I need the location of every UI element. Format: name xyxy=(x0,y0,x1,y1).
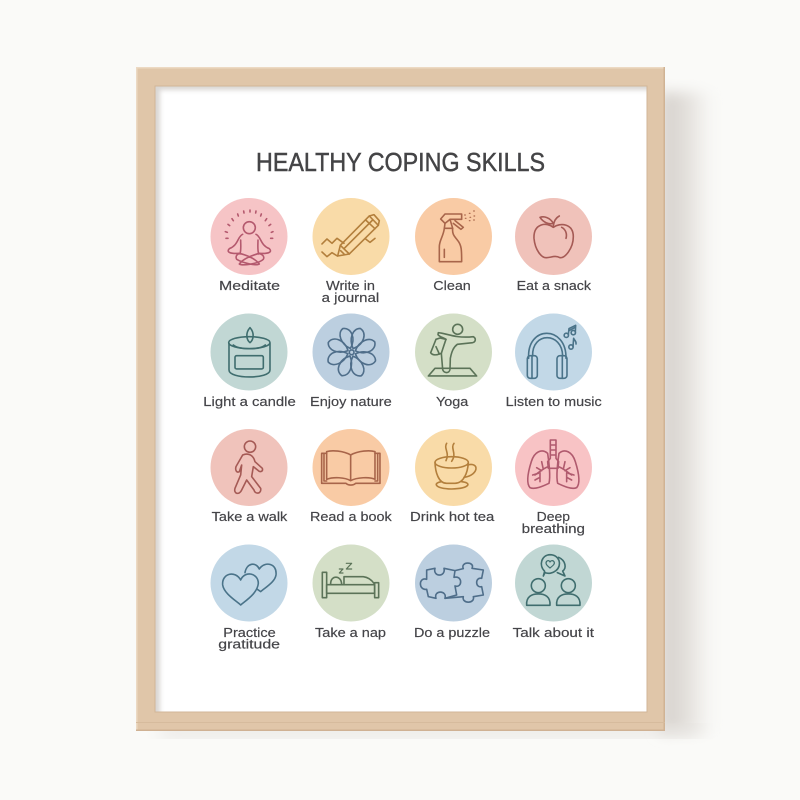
label: breathing xyxy=(522,521,585,536)
panel: gratitude xyxy=(210,544,288,652)
icon: two people talking xyxy=(527,555,580,605)
icon: pencil and writing xyxy=(322,215,379,257)
panel: meditate xyxy=(210,198,288,293)
panel: talk xyxy=(513,544,594,640)
label: Enjoy nature xyxy=(310,394,392,409)
label: Eat a snack xyxy=(517,278,592,293)
label: Do a puzzle xyxy=(414,625,490,640)
icon: spray bottle xyxy=(439,211,475,262)
label: Talk about it xyxy=(513,625,594,640)
icon: headphones and notes xyxy=(527,325,576,378)
frame shadow xyxy=(160,92,722,736)
poster paper xyxy=(150,80,652,718)
panel: nature xyxy=(310,314,392,409)
panel: puzzle xyxy=(414,544,492,640)
label: Deep xyxy=(537,509,570,524)
icon: cup of tea xyxy=(435,443,476,489)
panel: journal xyxy=(312,198,390,305)
label: Yoga xyxy=(436,394,469,409)
panel: music xyxy=(506,314,602,409)
panel: nap xyxy=(312,544,390,640)
label: Clean xyxy=(433,278,471,293)
icon: puzzle pieces xyxy=(420,563,483,602)
label: Light a candle xyxy=(203,394,296,409)
panel: tea xyxy=(410,429,495,524)
panel: candle xyxy=(203,314,296,409)
panel: book xyxy=(310,429,392,524)
label: gratitude xyxy=(218,636,280,652)
panel: clean xyxy=(415,198,492,293)
label xyxy=(218,625,280,652)
label: Practice xyxy=(223,625,276,640)
label: a journal xyxy=(322,290,379,305)
icon: flower xyxy=(326,326,377,378)
icon: walking person xyxy=(235,441,263,493)
label: Write in xyxy=(326,278,375,293)
panel: walk xyxy=(210,429,288,524)
label: Take a walk xyxy=(212,509,288,524)
panel: yoga xyxy=(415,314,492,409)
title: HEALTHY COPING SKILLS xyxy=(256,149,545,177)
panel: breathing xyxy=(515,429,592,536)
icon: lungs xyxy=(528,440,579,488)
icon: two hearts xyxy=(223,564,276,605)
wooden frame xyxy=(136,67,665,731)
icon: bed xyxy=(322,563,379,598)
label: Take a nap xyxy=(315,625,386,640)
label: Listen to music xyxy=(506,394,602,409)
label: Meditate xyxy=(219,278,280,293)
icon: apple xyxy=(534,216,573,258)
icon: open book xyxy=(322,451,380,485)
label xyxy=(522,509,585,536)
label: Drink hot tea xyxy=(410,509,495,524)
icon: yoga pose xyxy=(428,324,477,376)
icon: meditating person xyxy=(225,210,273,265)
label xyxy=(322,278,379,305)
panel: snack xyxy=(515,198,592,293)
label: Read a book xyxy=(310,509,392,524)
icon: candle xyxy=(229,328,270,377)
